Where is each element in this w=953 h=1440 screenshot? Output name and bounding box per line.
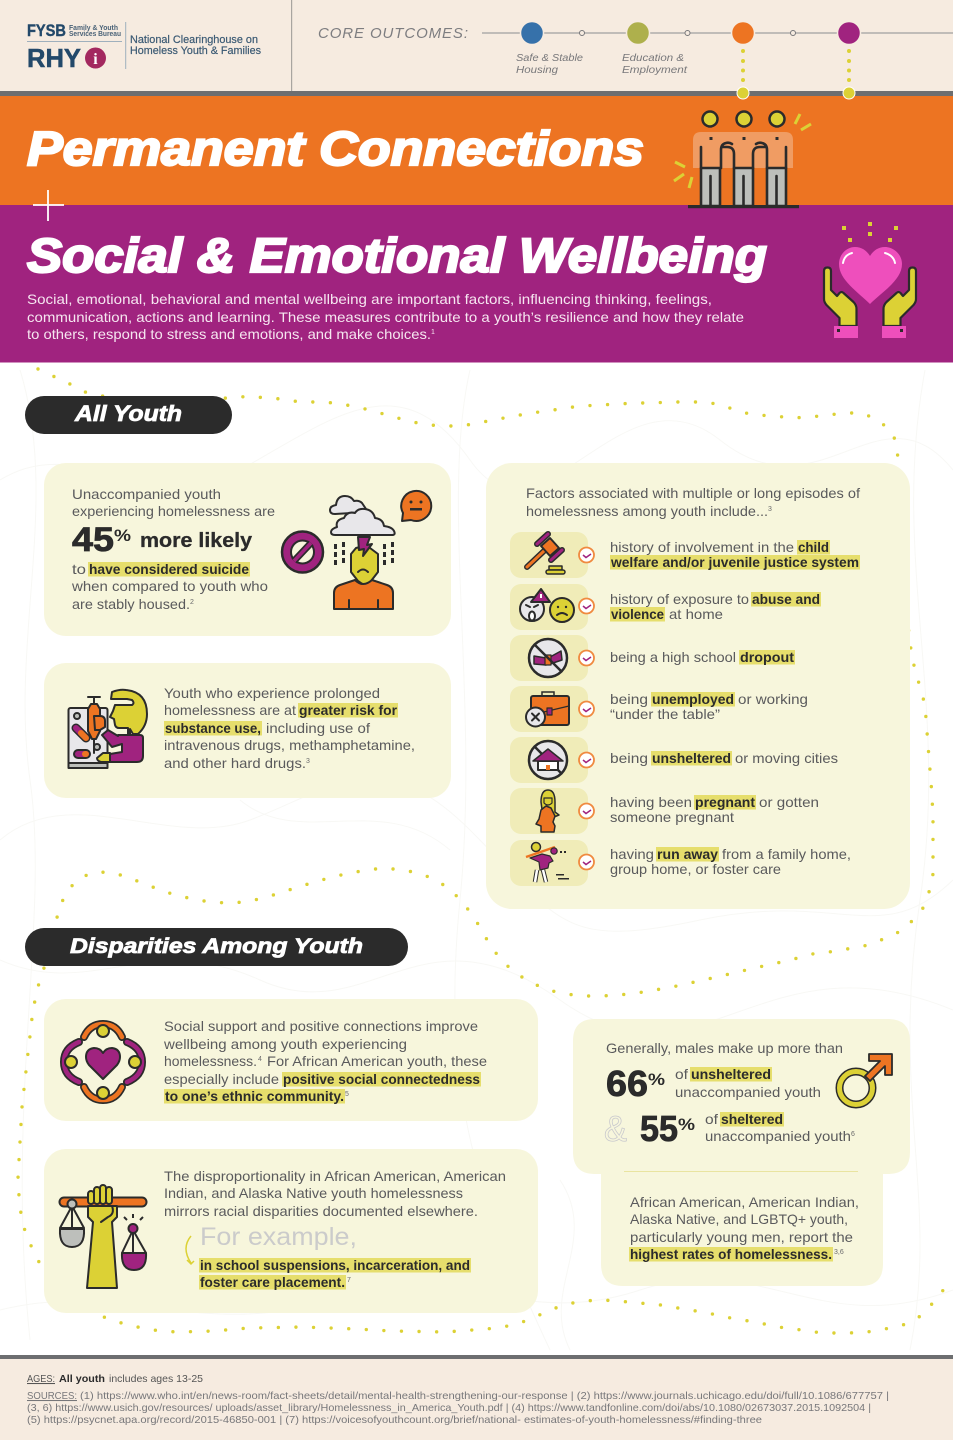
text: social support: 5 — [345, 1091, 349, 1098]
text: social support: wellbeing among youth experiencing — [163, 1036, 407, 1052]
text: suicide statistic: to — [72, 561, 86, 577]
factors intro text: homelessness among youth include... — [526, 503, 768, 519]
factor: pregnant — [510, 788, 819, 834]
text: males statistic — [604, 1040, 855, 1149]
icon: male symbol — [840, 1054, 892, 1104]
factors intro text: Factors associated with multiple or long episodes of — [526, 485, 860, 501]
icon: person with syringe and pills — [68, 690, 147, 768]
sources — [27, 1390, 889, 1426]
text: highest rates: 3,6 — [834, 1249, 844, 1256]
banner: social & emotional wellbeing — [0, 205, 953, 362]
text: males statistic: of — [705, 1111, 718, 1127]
factor: justice system — [510, 532, 860, 578]
factor: justice system: history of involvement in the — [610, 539, 794, 555]
text: social support: 4 — [258, 1056, 262, 1063]
panel: racial disparities — [44, 1149, 538, 1313]
panel: social support — [44, 999, 538, 1121]
text: highest rates: highest rates of homelessness. — [630, 1246, 832, 1262]
factor: pregnant: pregnant — [695, 794, 755, 810]
text: substance use: 3 — [306, 758, 310, 765]
core outcomes timeline: Housing — [516, 64, 558, 76]
text: substance use: Youth who experience prolonged — [164, 685, 380, 701]
factor: justice system: child — [798, 539, 829, 555]
factor: unemployed: or working — [738, 691, 808, 707]
text: males statistic: 66 — [606, 1063, 648, 1104]
factor: abuse and violence: at home — [669, 606, 723, 622]
header band — [0, 0, 953, 99]
ages note: AGES: — [27, 1373, 55, 1385]
intro paragraph: to others, respond to stress and emotions, and make choices. — [27, 326, 431, 342]
sources: SOURCES: — [27, 1390, 77, 1402]
intro paragraph: 1 — [431, 329, 435, 336]
text: racial disparities: 7 — [347, 1277, 351, 1284]
icon: prohibition sign — [282, 532, 323, 572]
text: racial disparities: foster care placement. — [200, 1274, 345, 1290]
factor: unemployed: being — [610, 691, 648, 707]
core outcomes timeline — [482, 22, 953, 99]
ages note — [27, 1373, 203, 1385]
text: highest rates: Alaska Native, and LGBTQ+ youth, — [630, 1211, 848, 1227]
text: substance use: substance use, — [165, 720, 261, 736]
text: males statistic: 6 — [851, 1131, 855, 1138]
text: suicide statistic: have considered suicide — [89, 561, 249, 577]
logo: FYSB RHY: Services Bureau — [69, 31, 121, 38]
factor: unemployed — [510, 686, 808, 732]
icon: heart in a circle of people — [64, 1024, 142, 1100]
intro paragraph: Social, emotional, behavioral and mental wellbeing are important factors, influencing thinking, feelings, — [27, 291, 712, 307]
text: suicide statistic: are stably housed. — [72, 596, 190, 612]
core outcomes timeline: Education & — [622, 52, 684, 64]
intro paragraph: communication, actions and learning. These measures contribute to a youth’s resilience and how they relate — [27, 309, 744, 325]
text: social support: homelessness. — [164, 1053, 257, 1069]
text: males statistic: Generally, males make up more than — [606, 1040, 843, 1056]
text: males statistic: unaccompanied youth — [705, 1128, 851, 1144]
icon: raised fist holding scales — [60, 1185, 146, 1288]
core outcomes timeline: Employment — [622, 64, 688, 76]
text: social support: to one’s ethnic community. — [165, 1088, 344, 1104]
factor: pregnant: having been — [610, 794, 692, 810]
text: social support: For African American youth, these — [267, 1053, 487, 1069]
factor: pregnant: someone pregnant — [610, 809, 734, 825]
factor: run away: run away — [657, 846, 718, 862]
factor: school dropout: being a high school — [610, 649, 736, 665]
panel: factors associated with homelessness — [486, 463, 910, 909]
text: social support: especially include — [164, 1071, 279, 1087]
factor: abuse and violence: history of exposure to — [610, 591, 749, 607]
title: permanent connections: Permanent Connections — [27, 123, 644, 176]
ages note: All youth — [59, 1373, 105, 1385]
banner: permanent connections — [0, 96, 953, 208]
factor: school dropout — [510, 635, 795, 681]
text: suicide statistic — [71, 486, 275, 612]
text: racial disparities: The disproportionality in African American, American — [164, 1168, 506, 1184]
logo: FYSB RHY — [27, 21, 261, 73]
text: males statistic: sheltered — [721, 1111, 783, 1127]
dotted path — [18, 369, 951, 1333]
logo: FYSB RHY: Homeless Youth & Families — [130, 45, 261, 57]
sources: (5) https://psycnet.apa.org/record/2015-46850-001 | (7) https://voicesofyouthcount.org/brief/national- estimates-of-youth-homelessness/#finding-three — [27, 1414, 762, 1426]
factor: unsheltered: or moving cities — [735, 750, 838, 766]
factor: justice system: welfare and/or juvenile justice system — [610, 554, 859, 570]
logo: FYSB RHY: Family & Youth — [69, 25, 118, 32]
text: social support — [163, 1018, 487, 1104]
heading: disparities among youth — [25, 928, 408, 966]
text: substance use: homelessness are at — [164, 702, 296, 718]
logo: FYSB RHY: i — [93, 51, 98, 68]
sources: (1) https://www.who.int/en/news-room/fact-sheets/detail/mental-health-strengthening-our-response | (2) https://www.journals.uchicago.edu/doi/full/10.1086/677757 | — [80, 1390, 889, 1402]
text: suicide statistic: when compared to youth who — [71, 578, 268, 594]
heading: all youth: All Youth — [74, 401, 182, 426]
text: racial disparities — [164, 1168, 506, 1290]
footer — [0, 1355, 953, 1440]
panel: substance use — [44, 663, 451, 798]
text: suicide statistic: % — [114, 526, 131, 545]
factor: run away: group home, or foster care — [610, 861, 781, 877]
text: highest rates: African American, American Indian, — [630, 1194, 859, 1210]
factor: unemployed: “under the table” — [610, 706, 720, 722]
text: suicide statistic: experiencing homelessness are — [72, 503, 275, 519]
logo: FYSB RHY: National Clearinghouse on — [130, 34, 258, 46]
factor: abuse and violence — [510, 584, 821, 630]
plus sign — [33, 190, 64, 221]
text: substance use: greater risk for — [299, 702, 398, 718]
ages note: includes ages 13-25 — [109, 1373, 203, 1385]
factor: unsheltered — [510, 737, 838, 783]
core outcomes timeline: Safe & Stable — [516, 52, 583, 64]
text: substance use: including use of — [266, 720, 370, 736]
factors intro text — [526, 485, 860, 519]
text: racial disparities: in school suspensions, incarceration, and — [200, 1257, 470, 1273]
panel: suicide statistic — [44, 463, 451, 636]
factor: run away: from a family home, — [722, 846, 851, 862]
text: suicide statistic: 2 — [190, 599, 194, 606]
icon: person under storm cloud — [330, 491, 431, 609]
text: social support: positive social connectedness — [283, 1071, 480, 1087]
text: substance use: and other hard drugs. — [164, 755, 306, 771]
text: males statistic: 55 — [640, 1108, 678, 1149]
factor: unsheltered: unsheltered — [652, 750, 731, 766]
text: racial disparities: Indian, and Alaska Native youth homelessness — [164, 1185, 463, 1201]
text: males statistic: of — [675, 1066, 688, 1082]
text: substance use — [164, 685, 415, 771]
sources: (3, 6) https://www.usich.gov/resources/ uploads/asset_library/Homelessness_in_America_Youth.pdf | (4) https://www.tandfonline.com/doi/abs/10.1080/02673037.2015.1092504 | — [27, 1402, 871, 1414]
panel: gender and disproportionate rates — [573, 1019, 910, 1286]
text: males statistic: % — [648, 1070, 665, 1089]
text: males statistic: & — [604, 1108, 627, 1149]
factor: run away — [510, 840, 851, 886]
text: substance use: intravenous drugs, methamphetamine, — [164, 737, 415, 753]
factor: abuse and violence: abuse and — [752, 591, 820, 607]
factor: pregnant: or gotten — [759, 794, 819, 810]
text: highest rates: particularly young men, report the — [630, 1229, 853, 1245]
logo: FYSB RHY: FYSB — [27, 21, 66, 40]
arrow: for example to list — [186, 1236, 194, 1264]
text: suicide statistic: 45 — [72, 521, 114, 559]
heading: all youth — [25, 396, 232, 434]
factor: abuse and violence: violence — [611, 606, 664, 622]
text: social support: Social support and positive connections improve — [164, 1018, 478, 1034]
factor: unsheltered: being — [610, 750, 648, 766]
intro paragraph — [27, 291, 744, 342]
text: males statistic: unsheltered — [691, 1066, 771, 1082]
core outcomes label: CORE OUTCOMES: — [318, 25, 468, 42]
text: highest rates — [629, 1194, 859, 1262]
title: social & emotional wellbeing: Social & Emotional Wellbeing — [27, 230, 767, 283]
text: racial disparities: For example, — [200, 1223, 357, 1251]
text: suicide statistic: Unaccompanied youth — [72, 486, 221, 502]
factor: unemployed: unemployed — [652, 691, 734, 707]
factors intro text: 3 — [768, 506, 772, 513]
icon: three linked people — [674, 112, 811, 208]
heading: disparities among youth: Disparities Among Youth — [70, 935, 363, 958]
factor: run away: having — [610, 846, 654, 862]
text: suicide statistic: more likely — [140, 530, 253, 552]
text: males statistic: % — [678, 1115, 695, 1134]
logo: FYSB RHY: RHY — [27, 43, 81, 73]
text: racial disparities: mirrors racial disparities documented elsewhere. — [164, 1203, 478, 1219]
icon: heart in hands — [824, 222, 916, 338]
factor: school dropout: dropout — [740, 649, 794, 665]
text: males statistic: unaccompanied youth — [675, 1084, 821, 1100]
